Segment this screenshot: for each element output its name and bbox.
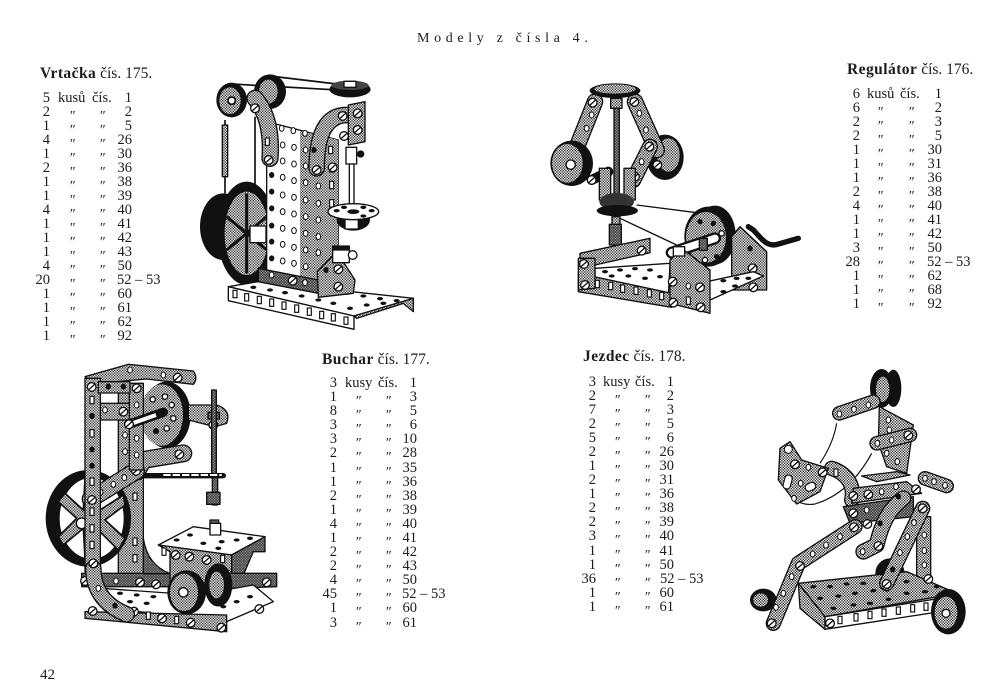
piece counts: 2 [589,388,596,404]
rear pulley [140,382,191,448]
part numbers: 41 [118,216,132,232]
piece counts: 1 [853,296,860,312]
anvil block [158,523,265,588]
ditto marks: ″″ [69,263,105,278]
ditto marks: ″″ [877,217,914,232]
piece counts: 5 [43,90,50,106]
part numbers: 50 [118,258,132,274]
base plate [228,282,413,329]
lower right link [631,142,662,181]
ditto marks: ″″ [614,519,650,534]
part numbers: 2 [667,388,674,404]
front right column [129,383,143,470]
column header words: kusů [58,90,85,106]
piece counts: 1 [43,174,50,190]
front pulley [216,83,247,117]
part numbers: 50 [660,557,674,573]
ditto marks: ″″ [69,193,105,208]
column header words: čís. [92,90,112,106]
piece counts: 1 [43,216,50,232]
ditto marks: ″″ [355,493,391,508]
part numbers: 38 [118,174,132,190]
top pulley [329,81,371,97]
part numbers: 39 [402,502,417,518]
part numbers: 38 [928,184,942,200]
governor disc [597,193,638,225]
base plate [798,572,957,629]
ditto marks: ″″ [614,533,650,548]
part numbers: 26 [660,444,674,460]
part numbers: 50 [402,572,417,588]
piece counts: 8 [330,403,337,419]
part numbers: 39 [118,188,132,204]
part numbers: 40 [928,198,942,214]
piece counts: 2 [330,488,337,504]
piece counts: 1 [853,156,860,172]
top cross strip [85,364,196,384]
part numbers: 6 [410,417,417,433]
piece counts: 4 [330,516,338,532]
piece counts: 2 [853,128,860,144]
piece counts: 1 [43,328,50,344]
right flyball [646,135,684,180]
shoulder strip [875,431,913,446]
ditto marks: ″″ [614,421,650,436]
ditto marks: ″″ [69,179,105,194]
part numbers: 41 [402,530,417,546]
part numbers: 1 [125,90,132,106]
piece counts: 1 [589,458,596,474]
head pulleys [870,369,901,408]
panel: Regulátor parts list [846,61,973,316]
corner bracket [317,246,357,297]
part range: 52 – 53 [660,571,704,587]
central shaft [611,98,622,205]
right bracket arm [188,405,228,429]
piece counts: 1 [330,460,337,476]
column header words: čís. [635,374,655,390]
part numbers: 60 [402,600,417,616]
lower foundation strip [81,538,173,589]
piece counts: 1 [589,585,596,601]
piece counts: 4 [330,572,338,588]
spindle [346,147,364,206]
piece counts: 3 [589,374,596,390]
link strip [86,467,140,504]
ditto marks: ″″ [69,277,105,292]
ditto marks: ″″ [877,147,914,162]
part numbers: 5 [935,128,942,144]
piece counts: 2 [589,500,596,516]
piece counts: 2 [43,104,50,120]
part numbers: 3 [667,402,674,418]
part numbers: 5 [125,118,132,134]
ditto marks: ″″ [614,590,650,605]
part numbers: 41 [660,543,674,559]
piece counts: 1 [853,142,860,158]
ditto marks: ″″ [69,235,105,250]
ditto marks: ″″ [614,393,650,408]
part numbers: 36 [928,170,942,186]
part numbers: 42 [402,544,417,560]
ditto marks: ″″ [355,422,391,437]
ditto marks: ″″ [614,491,650,506]
piece counts: 36 [582,571,596,587]
horse head plate [778,442,828,504]
ditto marks: ″″ [355,450,391,465]
part numbers: 10 [402,431,417,447]
ditto marks: ″″ [355,479,391,494]
part numbers: 60 [660,585,674,601]
ditto marks: ″″ [69,291,105,306]
part numbers: 40 [660,528,674,544]
panel: Vrtačka parts list [36,65,160,348]
part numbers: 61 [118,300,132,316]
piece counts: 1 [589,543,596,559]
piece counts: 1 [330,600,337,616]
piece counts: 1 [853,212,860,228]
ditto marks: ″″ [69,207,105,222]
ditto marks: ″″ [614,477,650,492]
front base strip [85,605,264,632]
illustration: Regulátor governor model [550,83,798,313]
ditto marks: ″″ [877,259,914,274]
right arm [630,98,657,150]
piece counts: 3 [330,431,337,447]
ditto marks: ″″ [69,123,105,138]
part numbers: 26 [118,132,132,148]
part numbers: 2 [935,100,942,116]
piece counts: 2 [330,445,337,461]
flywheel [200,182,276,285]
hammer lever [137,450,223,476]
piece counts: 4 [43,132,51,148]
part range: 52 – 53 [402,586,446,602]
part numbers: 30 [118,146,132,162]
piece counts: 4 [853,198,861,214]
part numbers: 36 [118,160,132,176]
ditto marks: ″″ [355,507,391,522]
cross member [98,403,133,420]
front base strip [578,258,672,307]
ditto marks: ″″ [877,231,914,246]
piece counts: 1 [330,530,337,546]
piece counts: 6 [853,100,860,116]
part numbers: 38 [660,500,674,516]
part numbers: 62 [118,314,132,330]
piece counts: 2 [589,472,596,488]
top cross bar [98,382,130,393]
piece counts: 1 [43,230,50,246]
piece counts: 3 [330,615,337,631]
top ring [590,83,640,98]
part numbers: 68 [928,282,942,298]
left curved strip [251,98,273,164]
column [609,224,621,245]
ditto marks: ″″ [877,287,914,302]
axle [125,412,163,429]
part numbers: 36 [660,486,674,502]
part numbers: 30 [928,142,942,158]
left arm [578,98,597,143]
base plate [102,585,273,622]
piece counts: 1 [330,389,337,405]
front left column [85,378,100,572]
piece counts: 5 [589,430,596,446]
ditto marks: ″″ [614,449,650,464]
saddle plate [862,472,910,482]
ditto marks: ″″ [355,535,391,550]
ditto marks: ″″ [877,119,914,134]
part numbers: 3 [935,114,942,130]
part numbers: 61 [660,599,674,615]
ditto marks: ″″ [69,305,105,320]
column header words: kusy [345,375,372,391]
piece counts: 1 [43,286,50,302]
ditto marks: ″″ [69,319,105,334]
part numbers: 2 [125,104,132,120]
part numbers: 40 [402,516,417,532]
ditto marks: ″″ [355,408,391,423]
part numbers: 28 [402,445,417,461]
piece counts: 1 [853,268,860,284]
piece counts: 6 [853,86,860,102]
lower left link [587,168,635,200]
part numbers: 31 [660,472,674,488]
part numbers: 36 [402,474,417,490]
piece counts: 3 [853,240,860,256]
ditto marks: ″″ [614,505,650,520]
piece counts: 3 [330,375,337,391]
piece counts: 1 [853,170,860,186]
piece counts: 3 [330,417,337,433]
ditto marks: ″″ [355,549,391,564]
part numbers: 38 [402,488,417,504]
spindle disc [328,204,379,231]
part numbers: 92 [928,296,942,312]
tail curved strip [832,468,852,500]
rear wheel behind [750,558,905,611]
ditto marks: ″″ [355,521,391,536]
piece counts: 1 [43,118,50,134]
heading: Regulátor: Regulátor čís. 176. [847,61,973,78]
crank bracket [732,227,798,290]
ditto marks: ″″ [355,563,391,578]
belts [225,76,350,193]
piece counts: 1 [589,599,596,615]
piece counts: 1 [43,244,50,260]
part numbers: 43 [402,558,417,574]
column header words: kusů [867,86,894,102]
ditto marks: ″″ [877,189,914,204]
page number: 42 [40,667,55,683]
ditto marks: ″″ [69,333,105,348]
piece counts: 2 [589,416,596,432]
piece counts: 7 [589,402,596,418]
panel: Buchar parts list [322,351,446,635]
right curved strip [311,112,347,174]
ditto marks: ″″ [69,109,105,124]
piece counts: 1 [43,300,50,316]
part numbers: 1 [667,374,674,390]
column header words: čís. [900,86,920,102]
spring tube [222,125,228,177]
flywheel [46,470,131,567]
ditto marks: ″″ [877,105,914,120]
piece counts: 2 [589,514,596,530]
part numbers: 41 [928,212,942,228]
ditto marks: ″″ [877,203,914,218]
small front wheel [167,563,232,614]
part numbers: 62 [928,268,942,284]
ditto marks: ″″ [69,165,105,180]
part numbers: 40 [118,202,132,218]
rear base plate [707,272,763,300]
reins [790,423,872,504]
ditto marks: ″″ [614,562,650,577]
hand strip [923,475,947,488]
foot angle strip [258,268,318,293]
part numbers: 43 [118,244,132,260]
piece counts: 1 [43,314,50,330]
piece counts: 2 [330,544,337,560]
ditto marks: ″″ [69,137,105,152]
part numbers: 6 [667,430,674,446]
title: Modely z čísla 4. [417,31,592,46]
ditto marks: ″″ [355,577,391,592]
part numbers: 61 [402,615,417,631]
torso column [878,407,913,473]
large pulley [684,206,736,267]
piece counts: 1 [853,282,860,298]
part numbers: 5 [410,403,417,419]
part numbers: 1 [410,375,417,391]
rear column [118,385,143,578]
ditto marks: ″″ [877,245,914,260]
part numbers: 92 [118,328,132,344]
ditto marks: ″″ [614,435,650,450]
ditto marks: ″″ [614,548,650,563]
main perforated plate [267,122,338,287]
ditto marks: ″″ [69,221,105,236]
piece counts: 4 [43,202,51,218]
illustration: Buchar hammer model [46,364,277,632]
part numbers: 42 [928,226,942,242]
ditto marks: ″″ [69,249,105,264]
part numbers: 50 [928,240,942,256]
piece counts: 2 [853,184,860,200]
part range: 52 – 53 [927,254,970,270]
piece counts: 2 [589,444,596,460]
part numbers: 39 [660,514,674,530]
piece counts: 28 [846,254,860,270]
ditto marks: ″″ [614,604,650,619]
heading: Buchar: Buchar čís. 177. [322,351,430,368]
ditto marks: ″″ [877,273,914,288]
ditto marks: ″″ [355,465,391,480]
rear legs [917,517,931,580]
ditto marks: ″″ [877,161,914,176]
heading: Vrtačka: Vrtačka čís. 175. [40,65,152,82]
curved leg [860,494,903,555]
ditto marks: ″″ [355,394,391,409]
piece counts: 1 [330,502,337,518]
part numbers: 1 [935,86,942,102]
belt lines [620,205,697,245]
arm strip [837,402,873,417]
piece counts: 1 [43,188,50,204]
piece counts: 2 [330,558,337,574]
right tail strip [230,573,277,588]
left flyball [550,141,593,186]
back pulley [254,74,286,109]
ditto marks: ″″ [69,151,105,166]
column header words: čís. [378,375,398,391]
part numbers: 5 [667,416,674,432]
part numbers: 30 [660,458,674,474]
illustration: Vrtačka drill model [200,74,413,329]
piece counts: 2 [43,160,50,176]
front wheel [931,589,966,634]
part range: 52 – 53 [117,272,160,288]
left base bracket [580,238,670,297]
piece counts: 20 [36,272,50,288]
piece counts: 2 [853,114,860,130]
part numbers: 42 [118,230,132,246]
body strips [843,482,922,528]
bracket strip [882,504,933,588]
ditto marks: ″″ [355,620,391,635]
part numbers: 31 [928,156,942,172]
part numbers: 60 [118,286,132,302]
ditto marks: ″″ [614,576,650,591]
ditto marks: ″″ [355,436,391,451]
piece counts: 1 [43,146,50,162]
ditto marks: ″″ [877,301,914,316]
axle [672,238,715,253]
heading: Jezdec: Jezdec čís. 178. [583,348,686,365]
piece counts: 1 [589,486,596,502]
spindle bracket [340,102,365,145]
part numbers: 35 [402,460,417,476]
illustration: Jezdec rider model [750,369,966,634]
ditto marks: ″″ [877,133,914,148]
column header words: kusy [603,374,630,390]
vertical rod [207,390,220,537]
piece counts: 45 [322,586,337,602]
piece counts: 1 [589,557,596,573]
piece counts: 3 [589,528,596,544]
piece counts: 1 [330,474,337,490]
ditto marks: ″″ [355,591,391,606]
piece counts: 4 [43,258,51,274]
front bracket [668,247,710,313]
panel: Jezdec parts list [582,348,704,619]
part numbers: 3 [410,389,417,405]
piece counts: 1 [853,226,860,242]
curved foot [89,559,127,614]
ditto marks: ″″ [614,463,650,478]
long front leg [767,523,858,628]
ditto marks: ″″ [877,175,914,190]
ditto marks: ″″ [614,407,650,422]
ditto marks: ″″ [355,605,391,620]
